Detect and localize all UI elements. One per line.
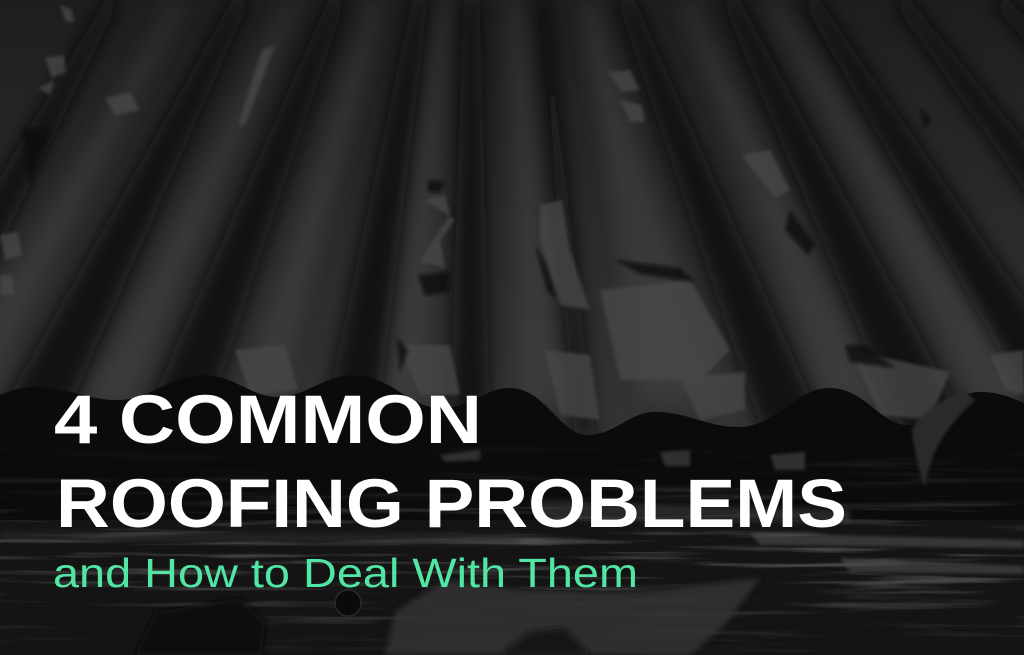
subtitle: and How to Deal With Them xyxy=(53,550,638,596)
roof peeling paint patches xyxy=(0,5,1024,420)
title line 1: 4 COMMON xyxy=(54,381,482,458)
roof grooves xyxy=(0,0,1024,440)
roof ridge highlights xyxy=(0,0,1024,400)
lower wall background xyxy=(0,450,1024,655)
curled roof flake xyxy=(912,392,975,488)
title xyxy=(54,381,847,542)
title line 2: ROOFING PROBLEMS xyxy=(56,465,847,542)
roof dark paint edges xyxy=(22,108,932,372)
corrugated roof xyxy=(0,0,1024,440)
